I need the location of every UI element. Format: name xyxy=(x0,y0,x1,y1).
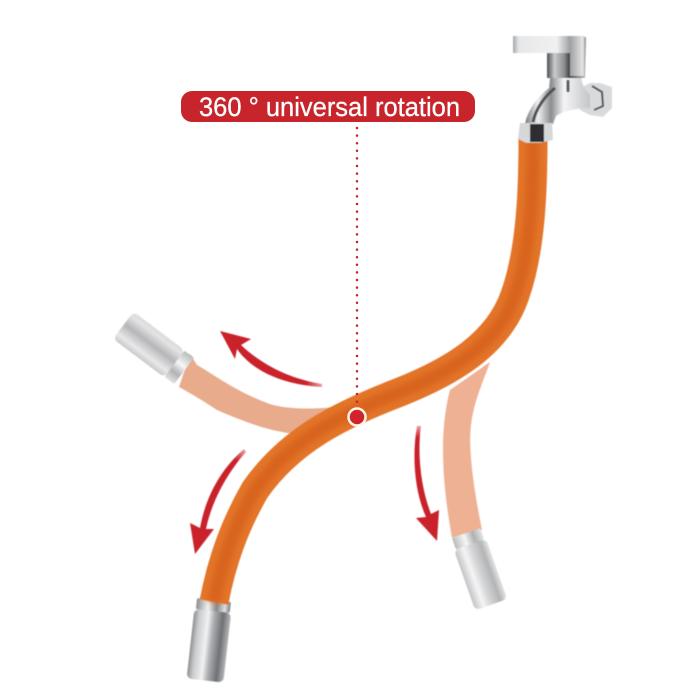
faucet xyxy=(513,36,612,143)
arrow: toward bottom left xyxy=(190,449,246,554)
faucet neck xyxy=(547,52,585,78)
main orange hose xyxy=(214,138,533,602)
rotation point marker xyxy=(348,408,366,426)
pale hose: right position xyxy=(443,362,490,538)
faucet spout body xyxy=(525,77,590,124)
pale hose: left position xyxy=(179,354,352,434)
arrow: toward left position xyxy=(220,331,322,387)
fitting: bottom metal nozzle xyxy=(187,598,232,683)
faucet right valve xyxy=(580,83,612,117)
fitting: left metal nozzle xyxy=(113,312,194,385)
arrow: toward bottom right xyxy=(414,426,439,541)
faucet nut xyxy=(518,123,553,143)
dotted leader line xyxy=(356,128,358,405)
fitting: right metal nozzle xyxy=(450,527,507,610)
label: 360 degree universal rotation: 360 ° universal rotation xyxy=(199,92,460,122)
faucet handle lever xyxy=(513,36,586,76)
